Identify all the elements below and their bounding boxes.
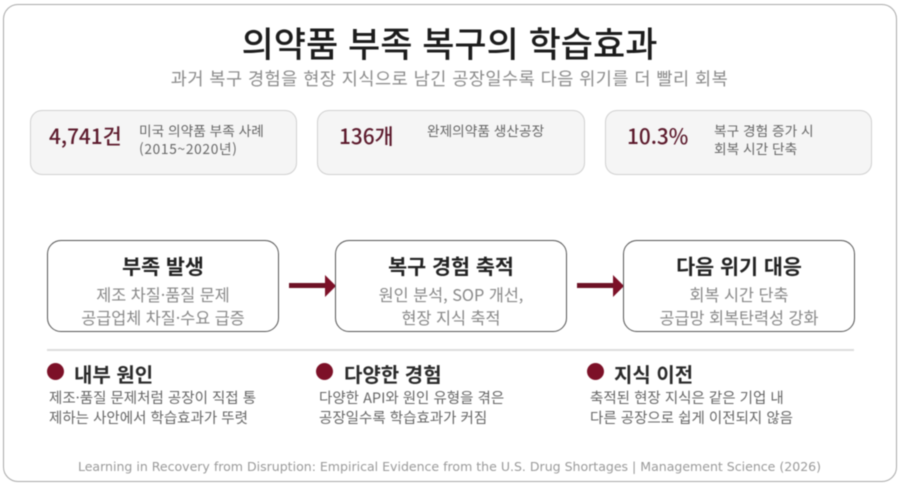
stat label: shortage cases [139,120,264,158]
finding heading: internal causes: 내부 원인 [74,359,153,388]
finding heading: knowledge transfer: 지식 이전 [614,359,693,388]
finding text: diverse experience: 공장일수록 학습효과가 커짐 [319,407,487,428]
flow text: recovery experience [378,282,523,329]
flow text: next crisis: 회복 시간 단축 [690,282,788,306]
flow text: shortage occurs: 공급업체 차질·수요 급증 [81,305,245,329]
stat number: 10.3%: 10.3% [627,120,688,150]
stat label: recovery time: 복구 경험 증가 시 [714,120,814,140]
flow text: recovery experience: 현장 지식 축적 [402,305,500,329]
stat label: shortage cases: 미국 의약품 부족 사례 [139,120,264,140]
finding heading: diverse experience: 다양한 경험 [344,359,442,388]
bullet: internal causes [47,363,64,380]
finding text: knowledge transfer [590,387,793,428]
stat label: recovery time: 회복 시간 단축 [714,138,797,158]
finding text: internal causes: 제조·품질 문제처럼 공장이 직접 통 [49,387,256,408]
flow text: next crisis [660,282,818,329]
stat number: 4,741건: 4,741건 [49,120,122,150]
finding text: diverse experience: 다양한 API와 원인 유형을 겪은 [319,387,504,408]
flow heading: next crisis: 다음 위기 대응 [676,250,802,280]
stat card: plants [317,110,585,175]
flow box: recovery experience [335,240,567,332]
stat card: shortage cases [30,110,297,175]
flow text: shortage occurs: 제조 차질·품질 문제 [96,282,230,306]
stat label: plants: 완제의약품 생산공장 [427,120,544,140]
subtitle: 과거 복구 경험을 현장 지식으로 남긴 공장일수록 다음 위기를 더 빨리 회복 [171,66,728,91]
flow text: next crisis: 공급망 회복탄력성 강화 [660,305,818,329]
arrow: step 2 to step 3 [576,274,624,298]
finding text: knowledge transfer: 다른 공장으로 쉽게 이전되지 않음 [590,407,793,428]
stat label: recovery time [714,120,814,158]
bullet: diverse experience [316,363,333,380]
flow text: recovery experience: 원인 분석, SOP 개선, [379,282,523,306]
finding text: knowledge transfer: 축적된 현장 지식은 같은 기업 내 [590,387,784,408]
flow text: shortage occurs [81,282,245,329]
flow box: next crisis [623,240,855,332]
flow heading: recovery experience: 복구 경험 축적 [388,250,514,280]
finding text: internal causes: 제하는 사안에서 학습효과가 뚜렷 [49,407,248,428]
flow box: shortage occurs [47,240,279,332]
bullet: knowledge transfer [587,363,604,380]
title: 의약품 부족 복구의 학습효과 [242,17,657,68]
source citation: Learning in Recovery from Disruption: Empirical Evidence from the U.S. Drug Shortages | Management Science (2026) [78,459,821,474]
finding text: internal causes [49,387,256,428]
stat label: shortage cases: (2015~2020년) [139,138,238,158]
stat card: recovery time [605,110,872,175]
flow heading: shortage occurs: 부족 발생 [122,250,204,280]
arrow: step 1 to step 2 [288,274,336,298]
finding text: diverse experience [319,387,504,428]
stat number: 136개: 136개 [339,120,394,150]
